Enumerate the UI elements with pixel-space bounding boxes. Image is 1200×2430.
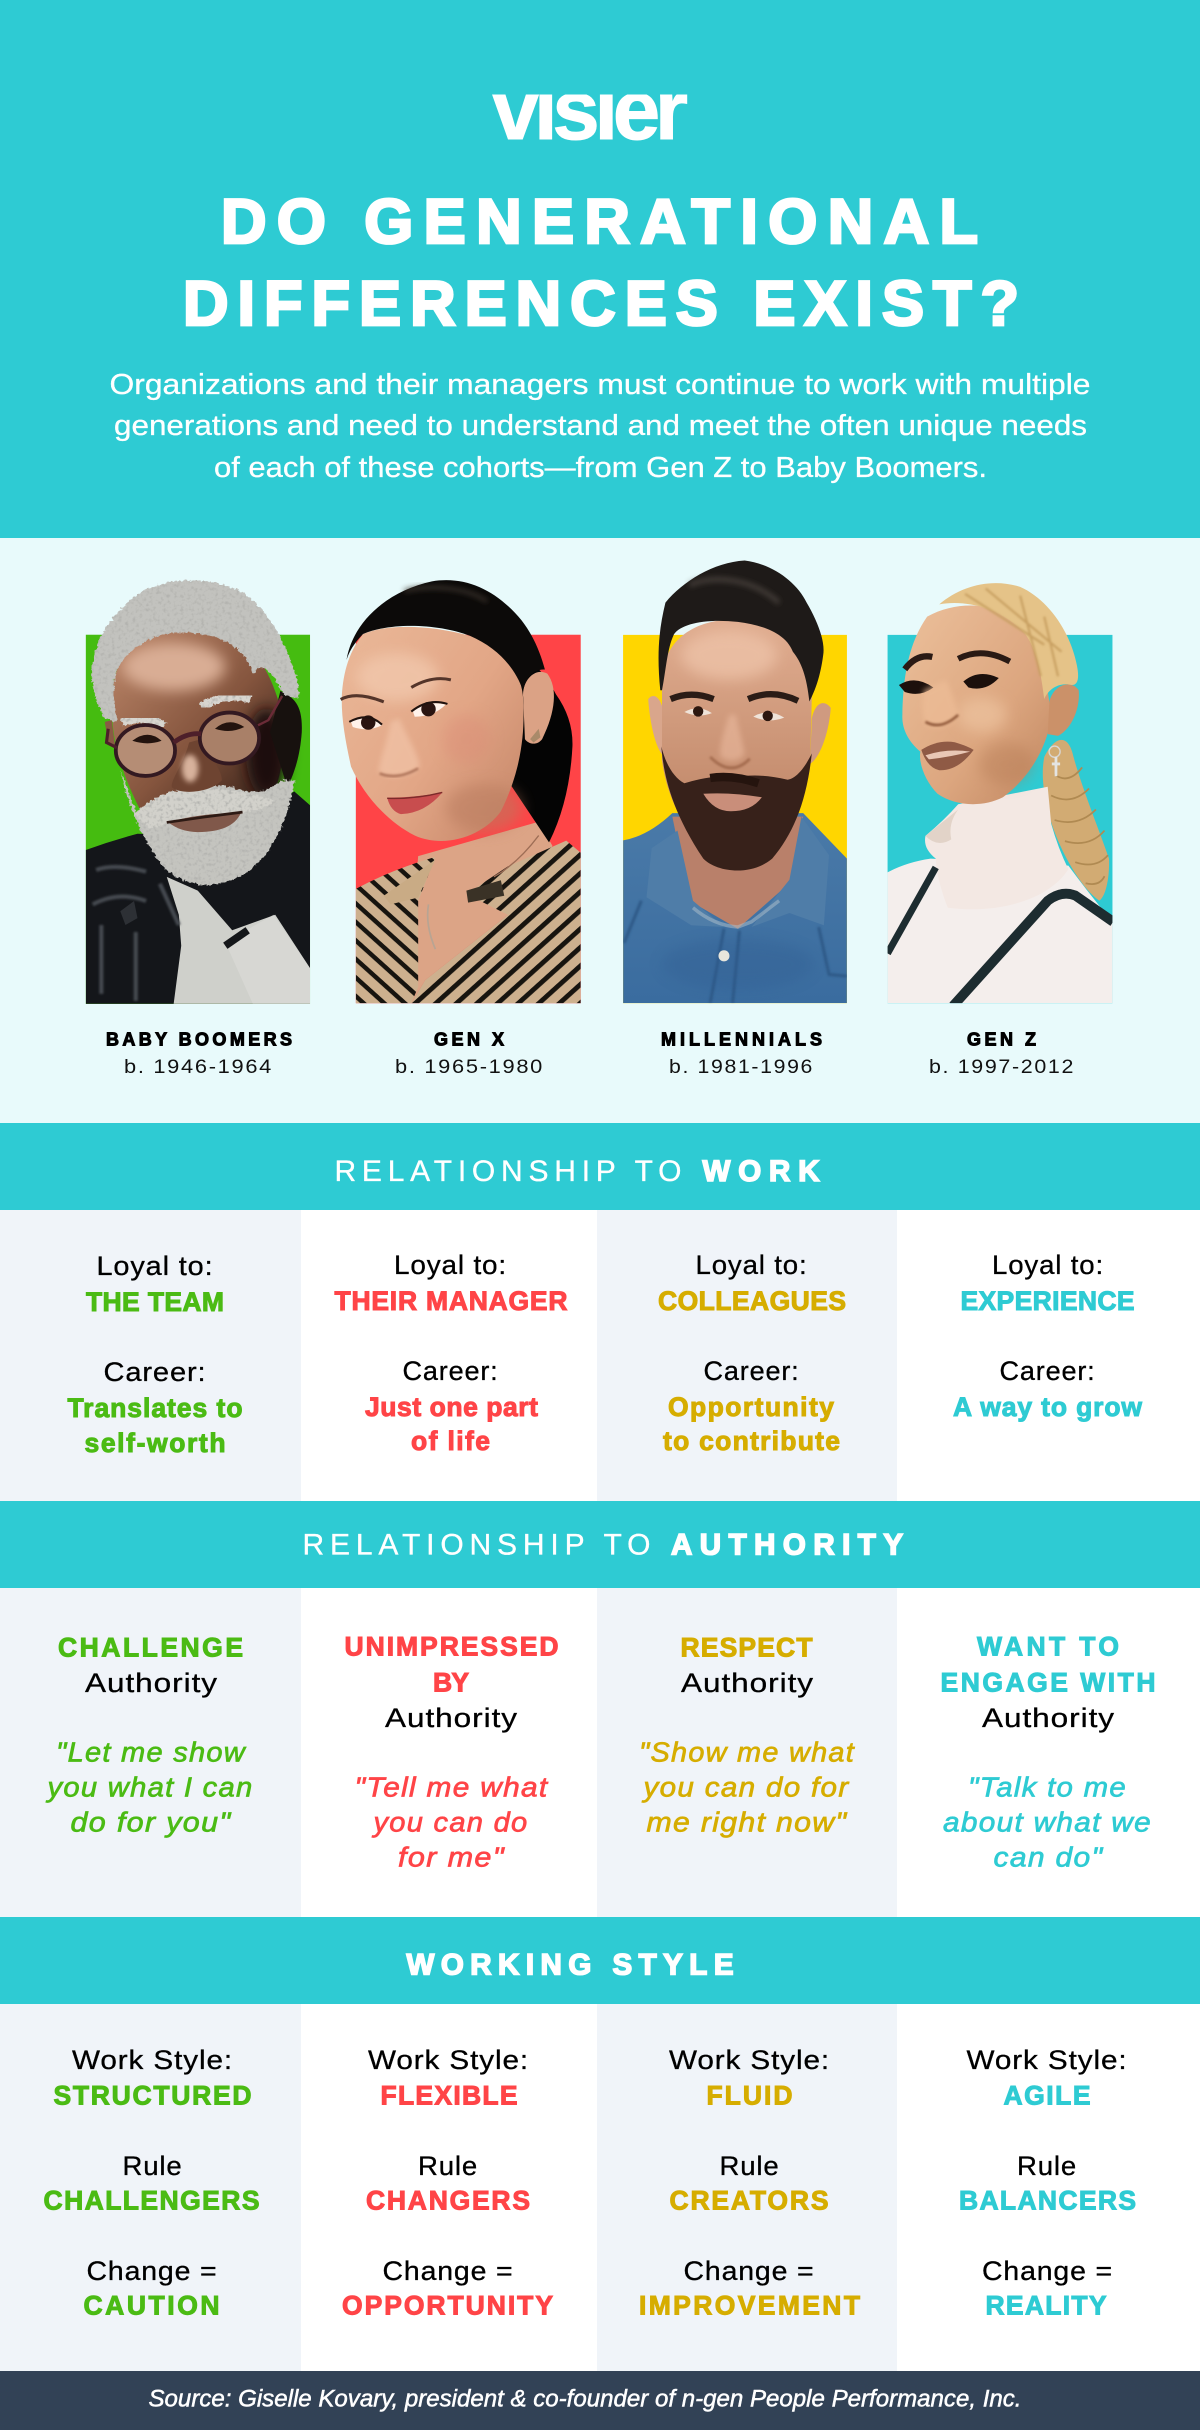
title: DO GENERATIONAL [221, 187, 978, 257]
column: millennials style [639, 2045, 860, 2320]
column: gen x work: THEIR MANAGER [334, 1286, 568, 1316]
column: millennials authority [639, 1632, 855, 1838]
column: baby boomers work: Career: [104, 1357, 206, 1387]
column: baby boomers style: CHALLENGERS [44, 2186, 260, 2216]
column: millennials work: Career: [704, 1356, 800, 1386]
intro text: generations and need to understand and meet the often unique needs [114, 410, 1087, 442]
column: gen x work: Career: [402, 1356, 498, 1386]
column: gen z work: A way to grow [953, 1392, 1142, 1422]
column: baby boomers authority: Authority [85, 1668, 218, 1698]
column: gen z authority: can do" [994, 1842, 1104, 1872]
title [183, 187, 1019, 339]
banner: relationship to work [0, 1123, 1200, 1210]
label: gen z: b. 1997-2012 [929, 1056, 1075, 1078]
column: gen x authority: UNIMPRESSED [344, 1632, 558, 1662]
section: working style [0, 1917, 1200, 2371]
column: gen x style: FLEXIBLE [380, 2080, 518, 2110]
portrait: millennials [623, 561, 847, 1003]
column: baby boomers authority: "Let me show [56, 1736, 247, 1768]
label: gen z [929, 1030, 1075, 1078]
column: millennials authority: you can do for [641, 1772, 850, 1802]
column: baby boomers style: CAUTION [84, 2290, 220, 2320]
column: millennials style: FLUID [706, 2080, 792, 2110]
banner: relationship to work: WORK [702, 1155, 820, 1188]
intro text: Organizations and their managers must continue to work with multiple [110, 369, 1090, 401]
column: gen z style: Change = [982, 2256, 1113, 2286]
column: gen x authority: "Tell me what [354, 1772, 549, 1802]
banner: relationship to authority [0, 1501, 1200, 1588]
column: gen z authority: about what we [943, 1806, 1152, 1838]
banner: relationship to authority: AUTHORITY [671, 1528, 903, 1562]
logo: visier: visier [492, 63, 688, 158]
column: baby boomers authority: CHALLENGE [58, 1632, 243, 1662]
column: baby boomers work [68, 1251, 242, 1458]
column: baby boomers authority: you what I can [45, 1772, 254, 1802]
footer: source [0, 2371, 1200, 2430]
column: gen x style: Work Style: [368, 2045, 529, 2075]
column: gen x work [334, 1250, 568, 1456]
section: relationship to authority [0, 1501, 1200, 1917]
label: gen x: b. 1965-1980 [395, 1056, 544, 1078]
column: baby boomers style: STRUCTURED [54, 2080, 252, 2110]
column: millennials authority: me right now" [646, 1806, 848, 1838]
column: gen x authority: you can do [371, 1806, 528, 1838]
column: baby boomers authority [45, 1632, 254, 1838]
column: millennials style: CREATORS [670, 2186, 828, 2216]
label: millennials [661, 1030, 822, 1078]
column: baby boomers work: THE TEAM [86, 1287, 224, 1317]
column: baby boomers style [44, 2045, 260, 2320]
column: gen x style [342, 2045, 553, 2320]
intro text [110, 369, 1090, 484]
column: millennials authority: "Show me what [639, 1736, 855, 1768]
portrait: gen z [887, 583, 1113, 1006]
column: gen z style: BALANCERS [959, 2186, 1136, 2216]
portrait: gen x [341, 580, 581, 1003]
label: gen x: GEN X [434, 1030, 504, 1050]
column: baby boomers style: Rule [122, 2151, 182, 2181]
label: millennials: b. 1981-1996 [669, 1056, 814, 1078]
column: baby boomers work: Translates to [68, 1393, 242, 1423]
column: gen z authority: WANT TO [977, 1632, 1119, 1662]
column: millennials style: Rule [720, 2151, 780, 2181]
column: gen z work: Loyal to: [992, 1250, 1104, 1280]
label: baby boomers: b. 1946-1964 [124, 1056, 273, 1078]
column: millennials style: Work Style: [669, 2045, 830, 2075]
column: baby boomers work: self-worth [84, 1428, 226, 1458]
column: millennials work: COLLEAGUES [658, 1286, 846, 1316]
title: DIFFERENCES EXIST? [183, 269, 1019, 339]
banner: working style: WORKING STYLE [406, 1948, 734, 1982]
column: gen z style: Rule [1017, 2151, 1077, 2181]
column: gen x style: OPPORTUNITY [342, 2290, 553, 2320]
column: gen z work: EXPERIENCE [960, 1286, 1134, 1316]
label: baby boomers [106, 1030, 292, 1078]
column: baby boomers style: Work Style: [72, 2045, 233, 2075]
column: millennials work: Loyal to: [696, 1250, 808, 1280]
column: gen x authority: BY [433, 1668, 469, 1698]
column: gen z work [953, 1250, 1142, 1422]
column: gen z style [959, 2045, 1136, 2320]
column: millennials style: Change = [684, 2256, 814, 2286]
label: gen z: GEN Z [967, 1030, 1036, 1050]
column: gen x work: Loyal to: [394, 1250, 507, 1280]
intro text: of each of these cohorts—from Gen Z to Baby Boomers. [214, 452, 987, 484]
label: millennials: MILLENNIALS [661, 1030, 822, 1050]
portrait: baby boomers [86, 580, 310, 1004]
column: gen z work: Career: [1000, 1356, 1096, 1386]
column: baby boomers style: Change = [86, 2256, 218, 2286]
column: gen x authority [344, 1632, 558, 1872]
column: gen z style: AGILE [1004, 2080, 1090, 2110]
label: gen x [395, 1030, 544, 1078]
column: gen x authority: for me" [398, 1842, 505, 1872]
footer: source: Source: Giselle Kovary, president & co-founder of n-gen People Performance, Inc. [148, 2386, 1022, 2412]
column: millennials work: Opportunity [668, 1392, 834, 1422]
column: gen x work: of life [411, 1426, 490, 1456]
panel: generations [0, 538, 1200, 1123]
banner: relationship to work: RELATIONSHIP TO [334, 1155, 682, 1188]
section: relationship to work [0, 1123, 1200, 1501]
column: baby boomers authority: do for you" [70, 1806, 232, 1838]
column: gen z style: REALITY [986, 2290, 1107, 2320]
column: gen x authority: Authority [385, 1703, 518, 1733]
column: millennials authority: RESPECT [680, 1632, 812, 1662]
column: millennials style: IMPROVEMENT [639, 2290, 860, 2320]
column: gen x style: Rule [418, 2151, 478, 2181]
column: gen x style: CHANGERS [366, 2186, 530, 2216]
banner: relationship to authority: RELATIONSHIP TO [302, 1528, 650, 1562]
panel: header [0, 0, 1200, 538]
column: gen x work: Just one part [365, 1392, 538, 1422]
column: millennials work: to contribute [663, 1426, 840, 1456]
column: baby boomers work: Loyal to: [96, 1251, 214, 1281]
column: gen z authority: ENGAGE WITH [940, 1668, 1156, 1698]
column: gen z authority: Authority [982, 1703, 1115, 1733]
label: baby boomers: BABY BOOMERS [106, 1030, 292, 1050]
column: gen z authority: "Talk to me [968, 1772, 1127, 1802]
column: gen z style: Work Style: [966, 2045, 1128, 2075]
column: gen x style: Change = [382, 2256, 514, 2286]
banner: working style [0, 1917, 1200, 2004]
column: gen z authority [940, 1632, 1156, 1872]
column: millennials work [658, 1250, 846, 1456]
column: millennials authority: Authority [681, 1668, 814, 1698]
